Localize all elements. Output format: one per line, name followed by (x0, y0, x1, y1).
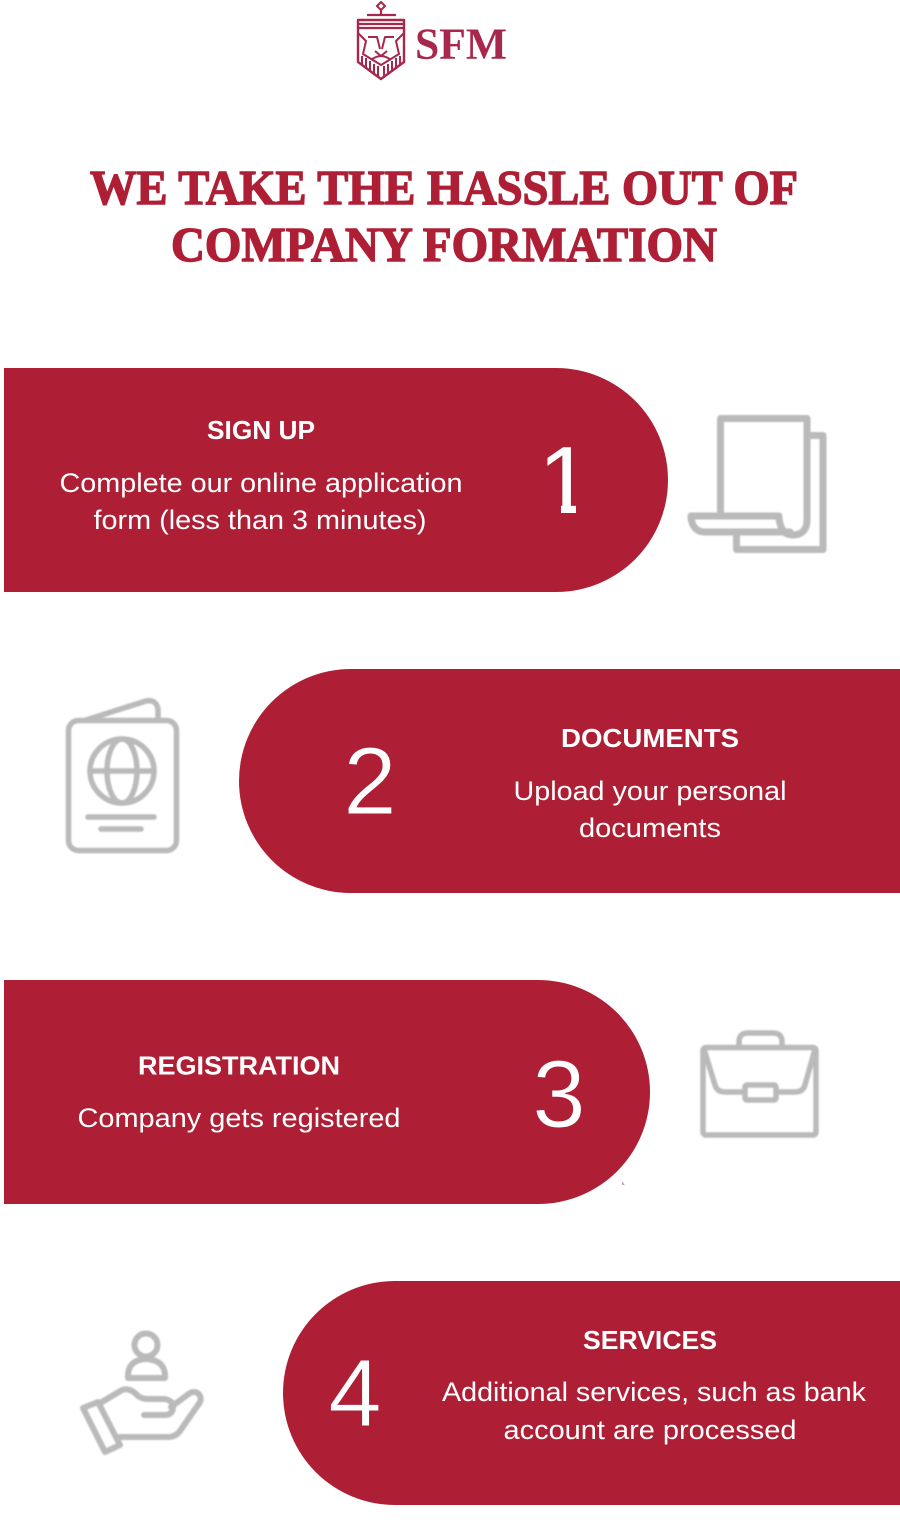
title: COMPANY FORMATION (171, 217, 717, 272)
icon: hand with person (83, 1334, 201, 1452)
text: sign up description: form (less than 3 minutes) (94, 505, 426, 535)
speck (622, 1181, 625, 1185)
text: services description (442, 1377, 867, 1445)
text: documents description: documents (579, 813, 721, 843)
icon: lion shield (358, 2, 404, 79)
heading: sign up: SIGN UP (207, 415, 315, 445)
text: services description: account are processed (504, 1415, 796, 1445)
heading: documents: DOCUMENTS (561, 723, 739, 753)
title: WE TAKE THE HASSLE OUT OF (90, 160, 798, 215)
icon: passport (68, 701, 176, 850)
text: sign up description (60, 468, 462, 535)
heading: services: SERVICES (583, 1325, 717, 1355)
number 3: 3 (532, 1041, 586, 1148)
title (90, 160, 798, 272)
icon: briefcase (703, 1033, 816, 1135)
text: sign up description: Complete our online application (60, 468, 462, 498)
panel: step 4 services (283, 1281, 900, 1505)
heading: registration: REGISTRATION (138, 1050, 340, 1080)
panel: step 3 registration (4, 980, 650, 1204)
logo: SFM (358, 2, 507, 79)
text: services description: Additional services, such as bank (442, 1377, 867, 1407)
icon: documents (691, 418, 823, 550)
number 4: 4 (328, 1340, 382, 1447)
panel: step 1 sign up (4, 368, 668, 592)
number 2: 2 (343, 728, 397, 835)
text: registration description: Company gets registered (78, 1103, 400, 1133)
number 1: 1 (538, 427, 592, 534)
panel: step 2 documents (239, 669, 900, 893)
text: documents description (514, 776, 786, 843)
logo wordmark: SFM (415, 20, 507, 68)
text: documents description: Upload your personal (514, 776, 786, 806)
